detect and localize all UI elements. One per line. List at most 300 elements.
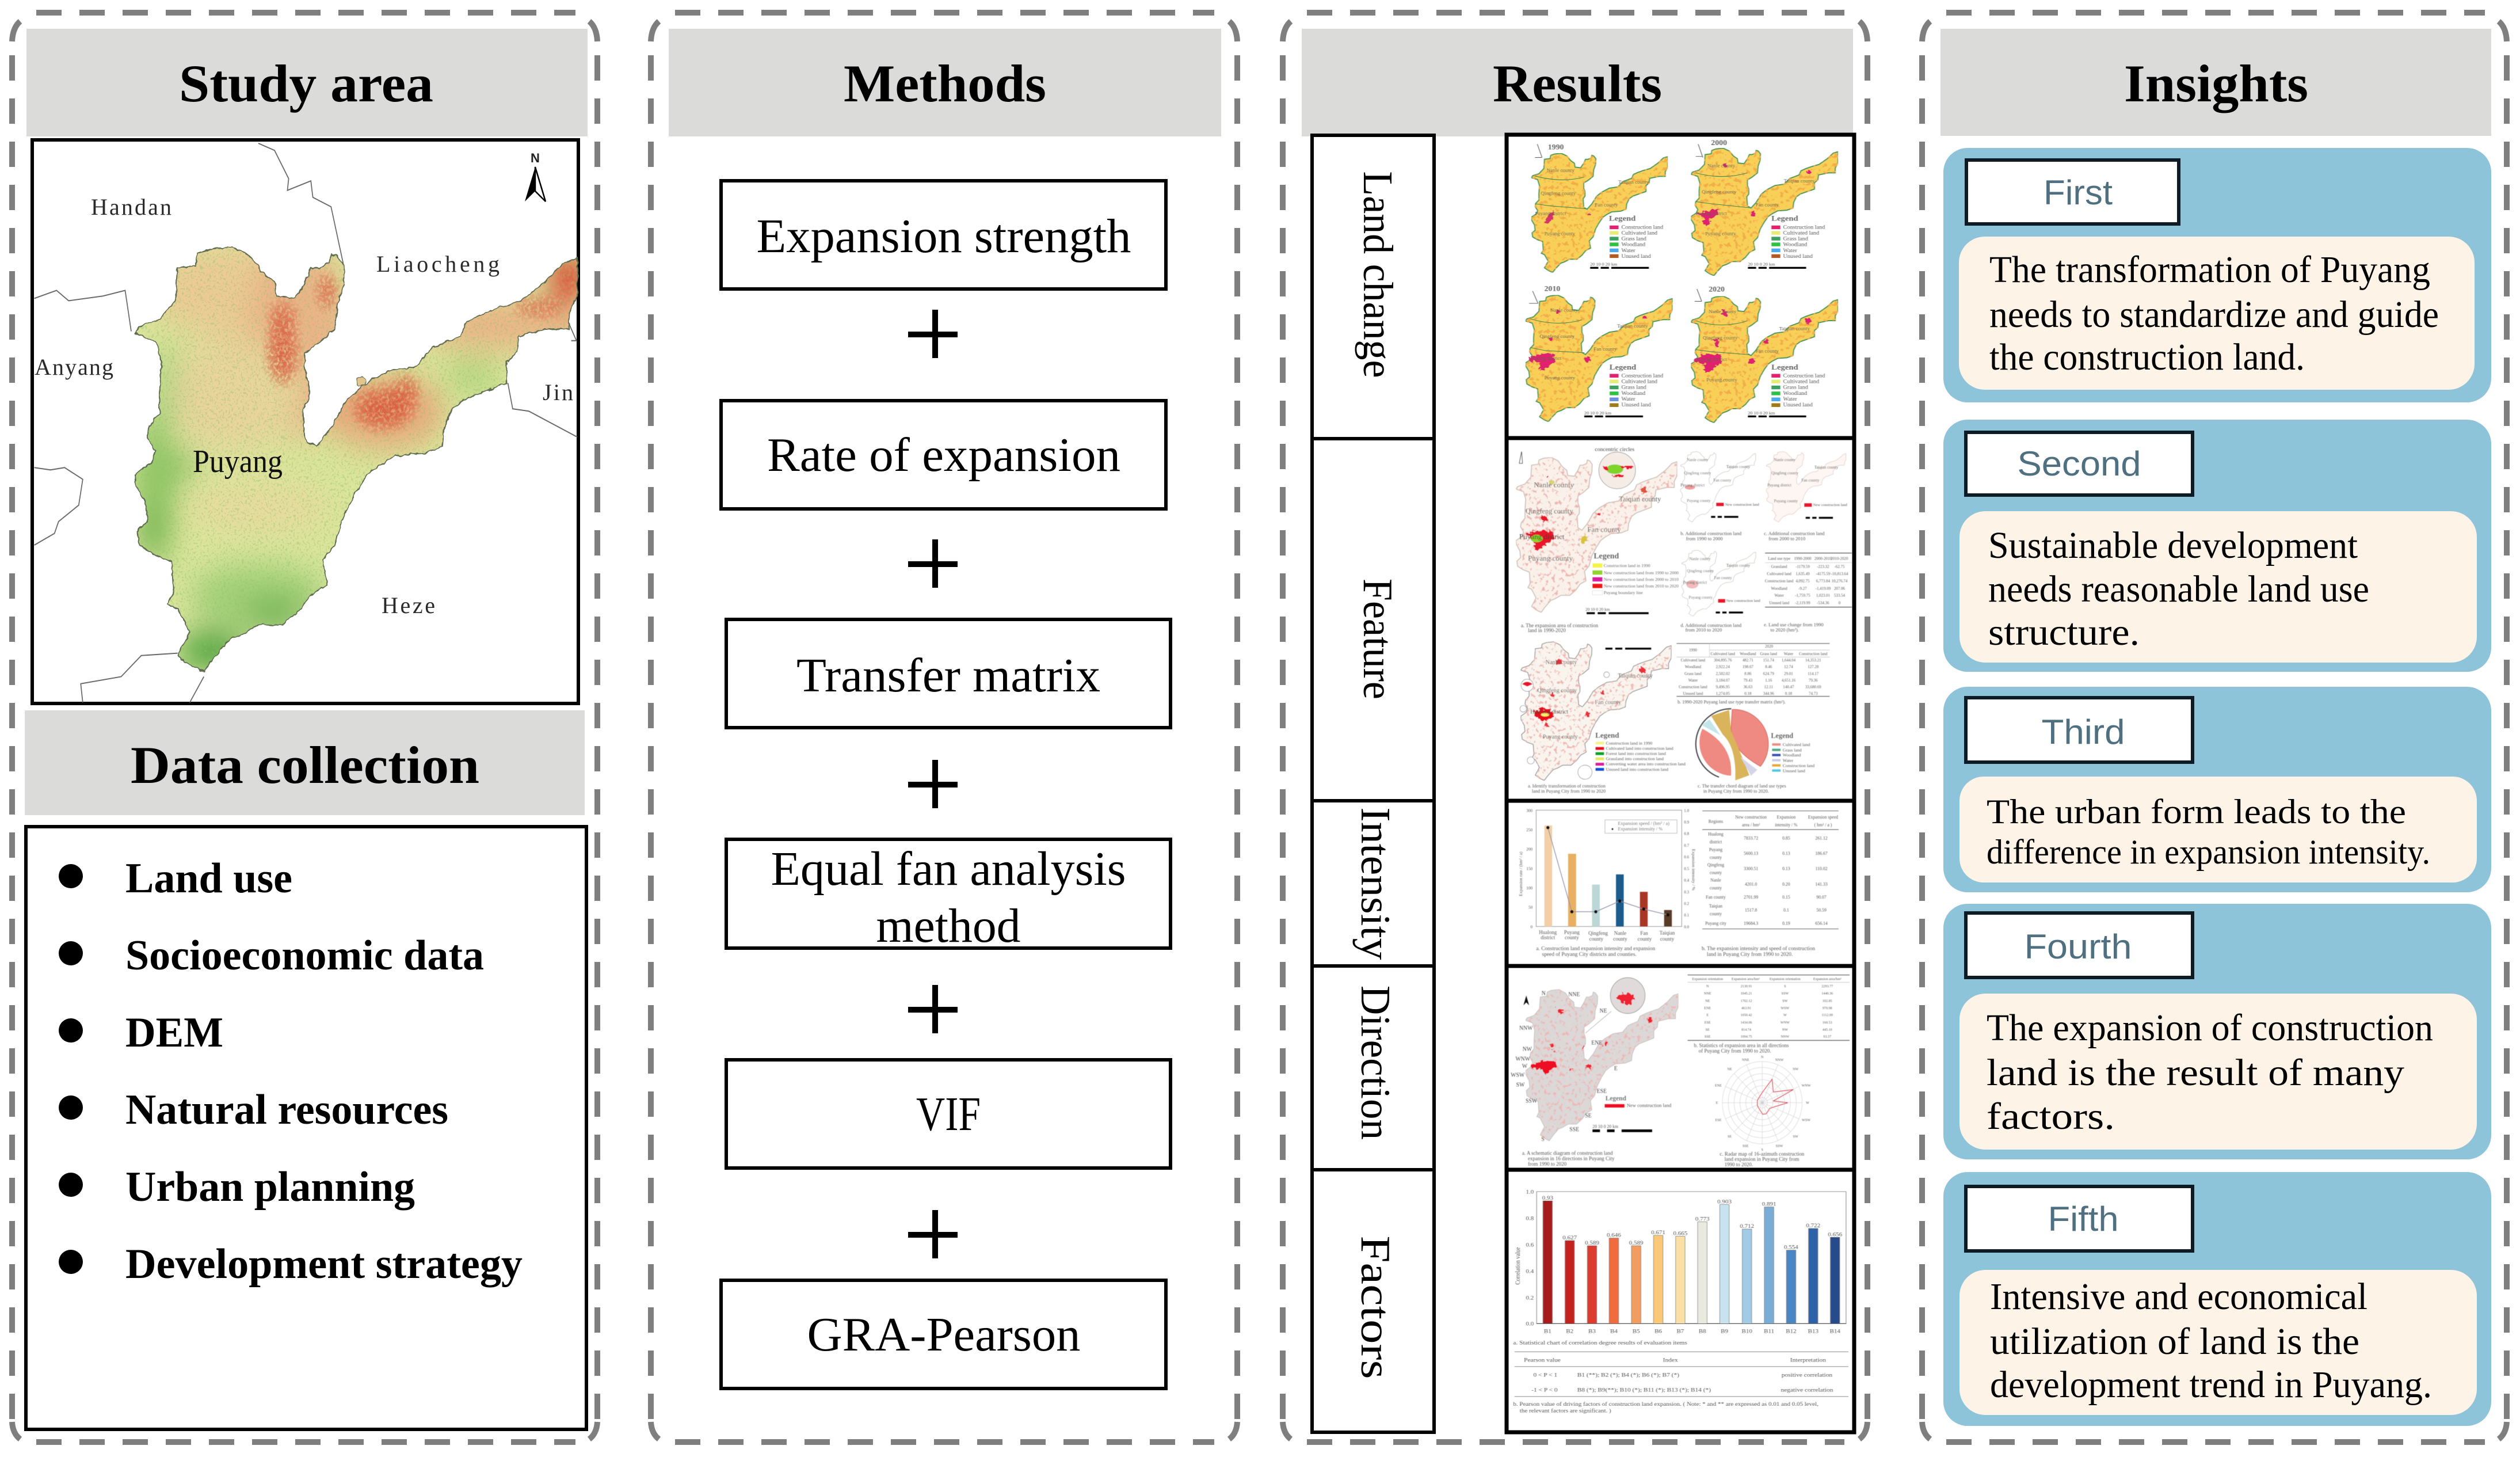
chart: correlation degree bars: 0.6 [1526,1242,1534,1248]
map b: additional construction land 1990-2000: Puyang county [1687,499,1711,503]
table: expansion area by direction: 1112.09 [1822,1013,1833,1017]
table g: transfer matrix: Cultivated land [1681,659,1706,663]
map: 2020: Fan county [1756,348,1779,354]
chart: correlation degree bars: Correlation value [1515,1247,1522,1285]
map d: additional construction land 2010-2020: d. Additional construction land [1680,622,1742,628]
chart: correlation degree bars: B13 [1808,1329,1818,1334]
label: Handan: Handan [91,194,171,220]
tag: first [1966,160,2179,224]
map d: additional construction land 2010-2020: Puyang county [1689,596,1713,600]
chart: radar of 16 azimuth expansion: E [1716,1101,1718,1105]
table g: transfer matrix: 1,274.05 [1716,692,1730,696]
text: second insight: Sustainable development [1988,524,2358,566]
map: 2000: Construction land [1783,225,1825,230]
text: first insight: the construction land. [1989,336,2305,378]
chart: expansion speed and intensity: Hualong [1539,929,1557,935]
chart: correlation degree bars: 0.0 [1526,1321,1534,1327]
tag: third [1966,698,2193,762]
chart: expansion speed and intensity: 200 [1526,847,1533,852]
chart: land use chord diagram: Water [1783,758,1793,763]
table g: transfer matrix: Construction land [1679,685,1707,689]
text: third insight: The urban form leads to the [1987,793,2406,831]
chart: expansion speed and intensity: Taiqian [1660,930,1675,935]
figure: factors chart and table [1513,1189,1848,1414]
chart: expansion speed and intensity: 0.3 [1684,890,1690,895]
table: expansion area by direction: Expansion area/hm² [1732,977,1760,982]
table: expansion intensity and speed: 261.12 [1815,835,1828,840]
map a: expansion area of construction land: Legend [1593,552,1619,561]
map: 16 direction expansion: W [1522,1063,1528,1070]
table g: transfer matrix: b. 1990-2020 Puyang land use type transfer matrix (hm²). [1678,699,1786,705]
chart: correlation degree bars: B4 [1610,1329,1618,1334]
table: expansion area by direction: 93.37 [1823,1035,1831,1039]
figure: land use maps 1990-2020 [1526,139,1838,423]
text: second insight: structure. [1988,611,2140,653]
table e: land use change: Woodland [1771,587,1787,591]
table: expansion area by direction: 160.53 [1823,1021,1832,1025]
tag: first: First [2044,173,2113,212]
table: Pearson values: Pearson value [1524,1357,1561,1363]
heading: results: Results [1493,54,1662,113]
map a: expansion area of construction land: Nanle county [1534,480,1574,489]
table e: land use change: -534.36 [1817,602,1829,606]
map: 1990: Qingfeng county [1541,191,1576,196]
chart: correlation degree bars: 0.2 [1526,1295,1534,1301]
heading: study area: Study area [179,54,433,113]
map b: additional construction land 1990-2000: Taiqian county [1726,465,1751,469]
map: 2020: Taiqian county [1779,326,1810,331]
map c: additional construction land 2000-2010: from 2000 to 2010 [1768,535,1805,541]
map a: expansion area of construction land: New construction land from 2010 to 2020 [1604,584,1679,589]
heading: methods: Methods [844,54,1046,113]
table: expansion intensity and speed: 0.13 [1782,851,1790,856]
table: expansion intensity and speed: county [1710,870,1722,876]
chart: correlation degree bars: 0.646 [1607,1232,1621,1238]
chart: land use chord diagram: Legend [1771,732,1793,740]
chart: correlation degree bars: 0.665 [1673,1231,1687,1237]
table: Pearson values: positive correlation [1782,1372,1833,1378]
map: 16 direction expansion: SE [1585,1113,1592,1119]
chart: radar of 16 azimuth expansion: WNW [1802,1083,1811,1087]
map f: identify transformation of construction land: Converting water area into construction land [1606,762,1686,767]
table: expansion area by direction: 814.74 [1741,1028,1751,1032]
chart: radar of 16 azimuth expansion: SSE [1743,1144,1749,1148]
map: 2010: Construction land [1621,373,1663,379]
map: 16 direction expansion: 20 10 0 20 km [1592,1124,1618,1129]
table: expansion intensity and speed: Expansion [1777,815,1795,820]
chart: correlation degree bars: B11 [1764,1329,1774,1334]
map b: additional construction land 1990-2000: New construction land [1725,503,1760,507]
map b: additional construction land 1990-2000: b. Additional construction land [1680,530,1742,536]
table: expansion intensity and speed: county [1710,911,1722,916]
chart: correlation degree bars: 0.589 [1585,1241,1599,1246]
table g: transfer matrix: 0.18 [1785,692,1793,696]
table e: land use change: -4175.59 [1816,572,1831,576]
map f: identify transformation of construction land: Forest land into construction land [1606,751,1666,756]
table e: land use change: Land use type [1768,557,1790,561]
table: Pearson values: Index [1663,1357,1679,1363]
table g: transfer matrix: Woodland [1685,665,1702,669]
map b: additional construction land 1990-2000: Fan county [1713,479,1732,483]
table: expansion intensity and speed: county [1710,855,1722,860]
chart: expansion speed and intensity: 0 [1531,924,1533,929]
label: Anyang: Anyang [35,354,113,380]
table e: land use change: 1,023.01 [1816,594,1831,598]
table g: transfer matrix: 14,353.21 [1805,659,1821,663]
table g: transfer matrix: 2020 [1765,645,1774,649]
table: expansion area by direction: 1434.06 [1741,1021,1752,1025]
chart: radar of 16 azimuth expansion: land expansion in Puyang City from [1725,1156,1799,1162]
map: 2020: Grass land [1783,385,1808,390]
text: second insight [1959,511,2477,663]
table g: transfer matrix: 624.79 [1763,672,1774,676]
chart: radar of 16 azimuth expansion: S [1762,1148,1764,1152]
table: expansion intensity and speed: 110.02 [1816,866,1828,871]
chart: land use chord diagram: Construction land [1783,763,1814,768]
chart: correlation degree bars: 0.8 [1526,1216,1534,1222]
map: 16 direction expansion: ENE [1591,1040,1602,1047]
method: transfer matrix [726,619,1171,728]
table: expansion area by direction: WNW [1781,1021,1790,1025]
table: expansion area by direction: E [1706,1013,1709,1017]
map b: additional construction land 1990-2000: from 1990 to 2000 [1686,535,1723,541]
table: expansion intensity and speed: county [1710,885,1722,891]
table g: transfer matrix: 79.43 [1744,679,1753,683]
chart: radar of 16 azimuth expansion: SE [1728,1135,1732,1139]
map d: additional construction land 2010-2020: Qingfeng county [1687,569,1714,573]
map: 2000: Taiqian county [1784,178,1815,184]
map f: identify transformation of construction land: Taiqian county [1618,673,1653,679]
map: 2010: Taiqian county [1617,324,1648,329]
method: expansion strength [721,181,1166,289]
map: 1990: Fan county [1595,202,1618,207]
chart: correlation degree bars: 0.554 [1784,1245,1798,1250]
table: Pearson values: B1 (**); B2 (*); B4 (*); B6 (*); B7 (*) [1577,1372,1680,1378]
heading: data collection: Data collection [131,736,479,794]
map: 1990: Puyang county [1545,231,1576,236]
heading: data collection [25,710,585,815]
icon: plus [908,310,958,358]
chart: land use chord diagram [1686,699,1814,794]
table g: transfer matrix: 482.71 [1743,659,1753,663]
table: expansion intensity and speed: b. The expansion intensity and speed of construction [1702,945,1815,952]
map c: additional construction land 2000-2010: Puyang district [1767,484,1791,488]
chart: correlation degree bars: 1.0 [1526,1189,1534,1195]
tag: fifth [1966,1186,2193,1251]
chart: radar of 16 azimuth expansion: SSW [1776,1144,1783,1148]
chart: correlation degree bars: 0.891 [1762,1202,1776,1207]
map: 1990: Grass land [1621,236,1646,242]
map: 2000: Nanle county [1707,163,1736,169]
table e: land use change: 2000-2010 [1814,557,1832,561]
figure: feature maps and tables [1516,447,1852,794]
table g: transfer matrix [1676,644,1829,705]
map d: additional construction land 2010-2020: from 2010 to 2020 [1685,627,1722,633]
method: VIF [726,1060,1171,1168]
map c: additional construction land 2000-2010: Qingfeng county [1771,471,1798,475]
chart: expansion speed and intensity: county [1589,936,1603,942]
label: direction: Direction [1352,986,1399,1140]
map shape: elevation fill [129,239,597,676]
item: DEM: DEM [125,1009,223,1056]
map: 2000: Woodland [1783,242,1807,248]
map f: identify transformation of construction land: Unused land into construction land [1606,767,1668,772]
map: 2020: Puyang district [1696,357,1728,362]
table: expansion intensity and speed: intensity / % [1775,822,1798,828]
table e: land use change: 10,276.74 [1832,580,1848,584]
table: expansion intensity and speed: 4201.0 [1745,881,1757,887]
chart: correlation degree bars: B10 [1742,1329,1752,1334]
table e: land use change: Cultivated land [1767,572,1791,576]
text: fifth insight: utilization of land is the [1990,1321,2359,1363]
label: feature: Feature [1355,579,1401,699]
chart: expansion speed and intensity: Qingfeng [1588,930,1608,936]
chart: expansion speed and intensity: 50 [1528,905,1533,910]
table e: land use change: Water [1774,594,1785,598]
chart: expansion speed and intensity: Expansion rate / (hm² / a) [1518,851,1523,896]
chart: expansion speed and intensity [1518,808,1696,957]
method: rate of expansion: Rate of expansion [767,428,1120,482]
table e: land use change: -10,813.64 [1831,572,1848,576]
map: 16 direction expansion: WSW [1511,1072,1525,1079]
map: 2000: Water [1783,248,1798,254]
item: natural resources: Natural resources [125,1086,448,1133]
icon: plus [908,539,958,588]
map: 1990: Legend [1609,214,1636,222]
map a: expansion area of construction land: New construction land from 1990 to 2000 [1604,570,1679,575]
table g: transfer matrix: 0.18 [1744,692,1752,696]
chart: correlation degree bars: B3 [1588,1329,1596,1334]
table g: transfer matrix: Grass land [1760,652,1778,656]
chart: expansion speed and intensity: Nanle [1614,930,1626,936]
text: third insight: difference in expansion intensity. [1987,833,2430,871]
table e: land use change: -62.75 [1835,565,1845,569]
map b: additional construction land 1990-2000: Nanle county [1687,458,1709,462]
map: 1990: Unused land [1621,253,1651,260]
map: 2010: Qingfeng county [1539,334,1575,339]
map d: additional construction land 2010-2020 [1680,550,1761,633]
text: fifth insight: Intensive and economical [1990,1276,2367,1318]
chart: expansion speed and intensity: district [1541,935,1556,941]
text: fourth insight [1959,994,2477,1150]
table: expansion intensity and speed: New construction [1735,815,1767,820]
table g: transfer matrix: 12.11 [1764,685,1773,689]
chart: correlation degree bars: 0.903 [1717,1200,1732,1205]
chart: radar of 16 azimuth expansion: NNE [1742,1058,1749,1062]
map: 2020: Nanle county [1709,309,1737,314]
map: 2020: 2020 [1709,285,1725,293]
map: 16 direction expansion: NE [1600,1008,1607,1014]
map f: identify transformation of construction land: Puyang county [1543,734,1579,740]
item: development strategy: Development strategy [125,1241,523,1288]
table: expansion area by direction: N [1706,984,1709,988]
table: expansion area by direction: of Puyang City from 1990 to 2020. [1699,1048,1771,1053]
map: 16 direction expansion: SW [1516,1082,1525,1089]
table g: transfer matrix: Water [1688,679,1698,683]
map: 1990: 20 10 0 20 km [1590,262,1617,267]
tag: second: Second [2018,444,2141,483]
table: expansion area by direction: 1094.75 [1741,1035,1752,1039]
map c: additional construction land 2000-2010: Nanle county [1774,458,1795,462]
map: 2020: Puyang county [1706,377,1738,383]
map f: identify transformation of construction land: Legend [1595,731,1619,739]
map a: expansion area of construction land: Fan county [1587,525,1621,534]
table e: land use change: Construction land [1765,580,1794,584]
chart: correlation degree bars: B8 [1699,1329,1706,1334]
map: 16 direction expansion: N [1542,990,1546,997]
text: third insight [1959,777,2477,882]
table: Pearson values: 0 < P < 1 [1533,1372,1557,1378]
map c: additional construction land 2000-2010: New construction land [1813,503,1848,507]
table e: land use change: -2,119.99 [1795,602,1810,606]
map: 16 direction expansion [1511,977,1678,1167]
table g: transfer matrix: 36.63 [1744,685,1753,689]
map a: expansion area of construction land: 20 10 0 20 km [1585,607,1610,612]
table: expansion intensity and speed: Hualong [1708,831,1724,837]
table: expansion intensity and speed: 19684.3 [1744,920,1758,926]
chart: correlation degree bars: B5 [1633,1329,1640,1334]
map: 16 direction expansion: SSE [1569,1127,1579,1133]
card: fourth insight [1943,904,2491,1159]
label: Jin: Jin [543,379,573,405]
label: Liaocheng: Liaocheng [376,251,500,277]
icon: plus [908,1210,958,1258]
map b: additional construction land 1990-2000: Puyang district [1680,484,1705,488]
map f: identify transformation of construction land: Cultivated land into construction land [1606,746,1673,751]
map a: expansion area of construction land: New construction land from 2000 to 2010 [1604,577,1679,582]
card: first insight [1943,148,2491,402]
map: 1990: Nanle county [1547,168,1575,173]
table g: transfer matrix: Woodland [1740,652,1756,656]
map: 2010: Grass land [1621,385,1646,390]
map: 16 direction expansion: WNW [1515,1056,1531,1062]
table: expansion intensity and speed: 0.1 [1783,907,1789,912]
chart: correlation degree bars: B6 [1654,1329,1662,1334]
text: fifth insight [1959,1270,2477,1415]
table g: transfer matrix: 8.86 [1744,672,1752,676]
card: second insight [1943,420,2491,672]
map: 1990: 1990 [1548,143,1564,151]
table: expansion intensity and speed: 50.59 [1816,907,1827,912]
table: expansion intensity and speed: 2701.99 [1744,895,1758,900]
chart: expansion speed and intensity: Expansion intensity / % [1691,849,1696,891]
map f: identify transformation of construction land: land in Puyang City from 1990 to 2020 [1532,789,1606,794]
map: 16 direction expansion: New construction land [1627,1102,1672,1108]
table g: transfer matrix: 1,644.04 [1782,659,1796,663]
map c: additional construction land 2000-2010 [1764,451,1848,541]
map: 2000: 20 10 0 20 km [1748,262,1775,267]
table: expansion intensity and speed: Nanle [1710,877,1721,883]
map: 2000 [1691,139,1838,276]
table: expansion intensity and speed: Fan county [1706,895,1726,900]
label: land change: Land change [1355,172,1401,378]
table: expansion area by direction: NE [1705,999,1710,1003]
table e: land use change: 2010-2020 [1831,557,1848,561]
table e: land use change: 6,773.84 [1816,580,1831,584]
text: fourth insight: land is the result of many [1987,1052,2404,1094]
table e: land use change: 0 [1839,602,1841,606]
map b: additional construction land 1990-2000: Qingfeng county [1684,471,1711,475]
map d: additional construction land 2010-2020: New construction land [1726,599,1761,603]
map: 2010: Legend [1610,363,1637,371]
map: 1990: Taiqian county [1618,180,1649,185]
table: expansion area by direction: NNW [1781,1035,1789,1039]
chart: expansion speed and intensity: 0.9 [1684,820,1690,825]
map: 2010: 2010 [1545,284,1561,292]
map a: expansion area of construction land: land in 1990-2020 [1528,627,1566,633]
table e: land use change: 533.54 [1834,594,1846,598]
tag: fifth: Fifth [2048,1200,2119,1238]
chart: expansion speed and intensity: county [1613,936,1627,942]
map: 2010: Puyang district [1530,356,1562,361]
chart: land use chord diagram: in Puyang City from 1990 to 2020. [1703,789,1769,794]
tag: third: Third [2042,713,2125,751]
heading: results [1302,29,1853,136]
map: 2000: Cultivated land [1783,230,1819,236]
table: expansion intensity and speed: Taiqian [1709,903,1722,909]
map: 16 direction expansion: S [1541,1136,1545,1143]
map: 2010: Fan county [1593,347,1617,352]
map: 16 direction expansion: NNE [1568,991,1580,998]
chart: correlation degree bars: B1 [1544,1329,1551,1334]
icon: plus [908,760,958,808]
table: expansion intensity and speed: Puyang [1709,847,1722,853]
text: first insight: needs to standardize and guide [1989,294,2439,336]
figure frame [1507,135,1854,1432]
chart: correlation degree bars: 0.671 [1651,1230,1665,1236]
chart: expansion speed and intensity: 0.6 [1684,855,1690,859]
chart: expansion speed and intensity: county [1638,936,1652,942]
table g: transfer matrix: 29.01 [1784,672,1793,676]
chart: correlation degree bars: 0.656 [1828,1232,1842,1238]
chart: radar of 16 azimuth expansion: NE [1727,1067,1732,1071]
map c: additional construction land 2000-2010: Taiqian county [1814,466,1839,470]
map a: expansion area of construction land: Qingfeng county [1526,507,1573,515]
map: 2000: Puyang district [1696,211,1728,216]
map: 2020: Cultivated land [1783,379,1819,385]
table e: land use change: Unused land [1769,602,1790,606]
map: 16 direction expansion: E [1614,1066,1618,1072]
map: 2000: Qingfeng county [1702,189,1737,195]
map: 2020: Legend [1771,363,1798,371]
table: expansion intensity and speed: 656.14 [1815,920,1828,926]
map: 16 direction expansion: SSW [1526,1098,1538,1105]
map d: additional construction land 2010-2020: Nanle county [1689,557,1711,561]
chart: radar of 16 azimuth expansion: c. Radar map of 16-azimuth construction [1720,1151,1805,1157]
chart: correlation degree bars [1513,1189,1846,1346]
chart: correlation degree bars: 0.627 [1562,1235,1577,1241]
table: expansion area by direction: 970.98 [1823,1006,1832,1010]
map f: identify transformation of construction land [1520,642,1686,794]
table: expansion intensity and speed: ( hm² / a ) [1814,822,1832,828]
table: expansion area by direction: 1702.12 [1741,999,1752,1003]
table: Pearson values: b. Pearson value of driving factors of construction land expansion. ( Note: * and ** are expressed as 0.01 and 0.05 level, [1513,1402,1818,1407]
heading: insights [1940,29,2491,136]
table e: land use change: -223.32 [1817,565,1829,569]
card: fifth insight [1943,1172,2491,1426]
map: 2010: Unused land [1621,402,1651,408]
table g: transfer matrix: 1.16 [1765,679,1772,683]
table: expansion intensity and speed: 0.19 [1782,920,1790,926]
chart: radar of 16 azimuth expansion: WSW [1802,1118,1810,1123]
tag: second [1966,432,2193,495]
table: expansion area by direction: SW [1782,999,1788,1003]
panel: study area and data collection [12,13,597,1442]
table: expansion area by direction: WSW [1781,1006,1789,1010]
chart: correlation degree bars: B9 [1721,1329,1728,1334]
map: 2020 [1691,285,1838,423]
table: expansion area by direction: ESE [1705,1021,1711,1025]
